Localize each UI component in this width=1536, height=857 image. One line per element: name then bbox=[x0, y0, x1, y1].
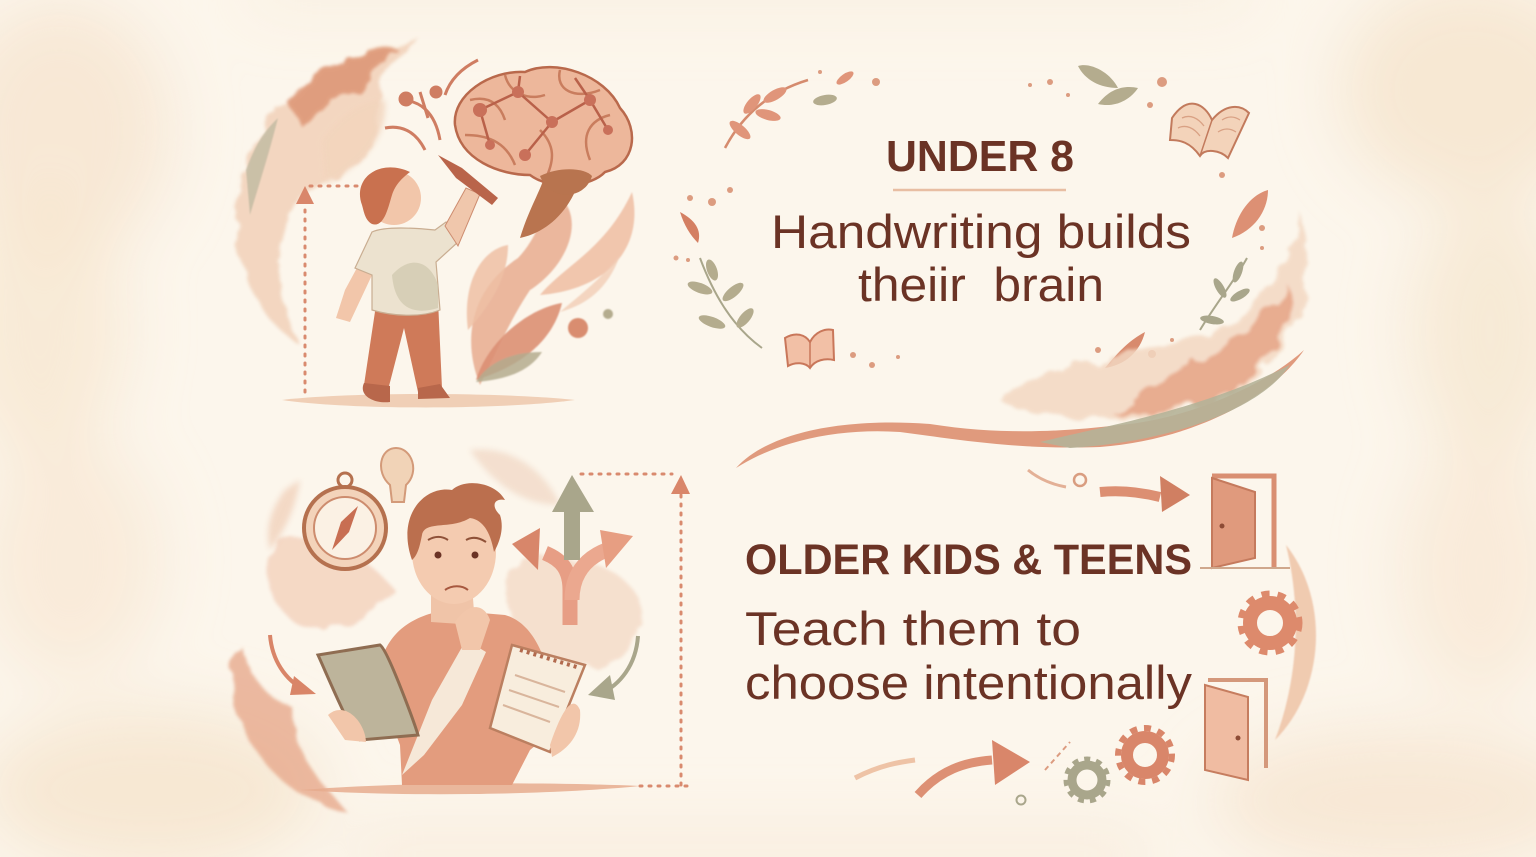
illustration: child reaching to brain bbox=[236, 38, 634, 408]
neural sprigs bbox=[385, 60, 478, 150]
watercolor right swoosh bbox=[1275, 545, 1316, 740]
watercolor swoosh lower right bbox=[736, 210, 1307, 468]
notepad bbox=[490, 645, 585, 757]
tablet bbox=[318, 645, 418, 742]
ground bbox=[282, 394, 575, 408]
text: handwriting builds their brain: Handwriting builds bbox=[771, 205, 1191, 258]
icon: top door bbox=[1200, 476, 1290, 568]
ground bbox=[300, 783, 640, 794]
icon: small open book bbox=[785, 330, 834, 368]
growth arrow dotted bbox=[296, 186, 362, 392]
watercolor swoosh behind child bbox=[236, 38, 420, 345]
wreath leaves left bbox=[674, 69, 900, 368]
light bulb bbox=[381, 448, 413, 502]
curved arrows bbox=[270, 635, 638, 700]
panel: under 8 wreath bbox=[674, 65, 1307, 468]
panel: older kids and teens: choose intentionally bbox=[745, 656, 1193, 709]
heading: older kids and teens: OLDER KIDS & TEENS bbox=[745, 536, 1192, 584]
brain bbox=[455, 67, 632, 238]
panel: under 8 wreath: theiir brain bbox=[858, 258, 1104, 311]
icon: gear middle bbox=[1241, 594, 1299, 652]
arrow and gears bottom bbox=[855, 728, 1172, 804]
wreath right leaves bbox=[1028, 65, 1268, 368]
watercolor washes bbox=[232, 449, 640, 810]
teen bbox=[318, 483, 585, 785]
icon: bottom door bbox=[1205, 680, 1266, 780]
text: teach them to choose intentionally: Teach them to bbox=[745, 602, 1081, 655]
flowing leaves from brain bbox=[467, 190, 634, 385]
compass bbox=[304, 473, 386, 569]
heading: under 8: UNDER 8 bbox=[886, 132, 1074, 181]
diverging arrows bbox=[512, 475, 633, 625]
child bbox=[336, 155, 498, 402]
illustration: teen choosing bbox=[232, 448, 690, 810]
dotted height arrow bbox=[581, 474, 690, 786]
icon: open book top right bbox=[1170, 104, 1249, 158]
panel: older kids and teens bbox=[745, 470, 1316, 804]
arrow to top door bbox=[1028, 470, 1190, 512]
